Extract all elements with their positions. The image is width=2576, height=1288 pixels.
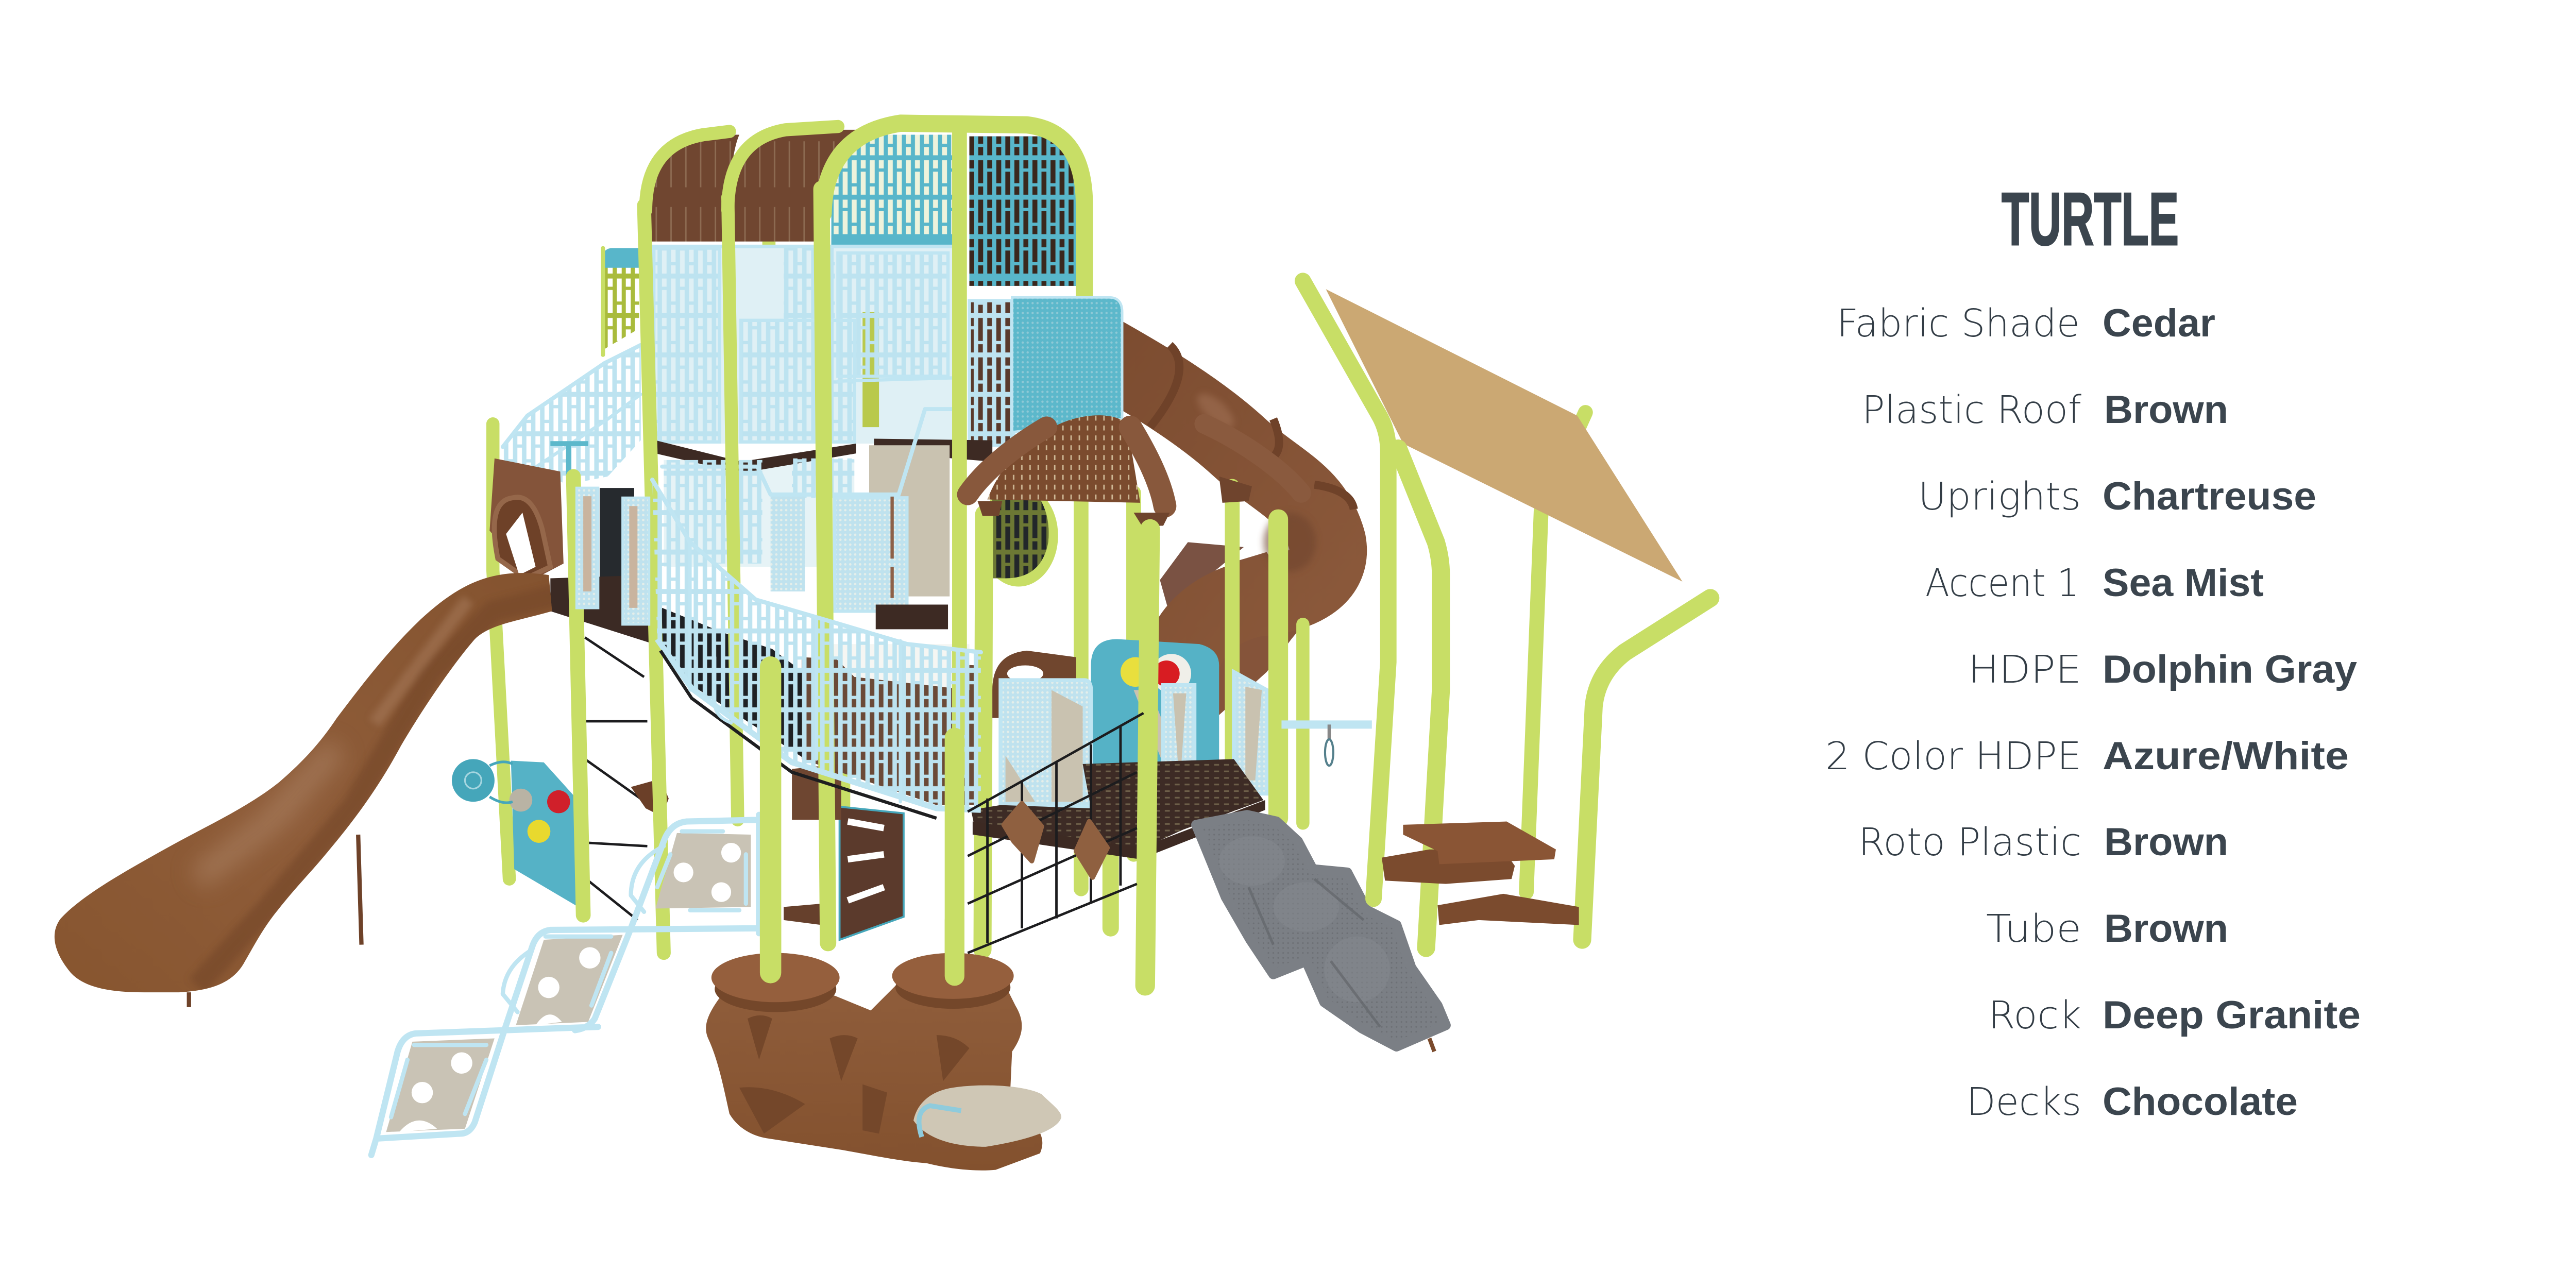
music panel with knobs bbox=[452, 759, 579, 907]
slide hood bbox=[489, 459, 564, 580]
slide supports bbox=[189, 835, 362, 1007]
panel: small mist gates bbox=[577, 488, 649, 624]
playground illustration bbox=[55, 123, 1710, 1171]
panel: azure roof panels bbox=[832, 134, 1084, 286]
rope net bbox=[968, 713, 1144, 953]
shade structure bbox=[1303, 281, 1710, 948]
tube slide bbox=[1097, 345, 1354, 718]
row: 2 color hdpe: Azure/White bbox=[2103, 734, 2349, 778]
row: roto plastic: Brown bbox=[2104, 820, 2228, 864]
row: rock bbox=[1988, 993, 2361, 1038]
small play roof bbox=[968, 415, 1301, 526]
row: decks: Decks bbox=[1967, 1080, 2081, 1124]
upper deck bbox=[655, 438, 992, 473]
rear shade post bbox=[1527, 412, 1585, 892]
row: 2 color hdpe: 2 Color HDPE bbox=[1825, 734, 2081, 778]
row: hdpe: Dolphin Gray bbox=[2103, 648, 2357, 691]
dark interior backdrop bbox=[550, 488, 977, 805]
panel: perforated play panels bbox=[992, 639, 1267, 811]
stepping pods bbox=[1382, 822, 1579, 925]
panel: brown plastic roof bbox=[651, 130, 862, 242]
hanging swing bar bbox=[1281, 724, 1372, 766]
row: rock: Rock bbox=[1988, 993, 2081, 1038]
straight slide bbox=[55, 573, 558, 1007]
posts under small roof bbox=[1145, 519, 1278, 986]
spiral ramp railing upper bbox=[503, 345, 641, 485]
row: hdpe bbox=[1968, 648, 2357, 692]
row: accent 1: Accent 1 bbox=[1925, 561, 2079, 605]
back posts bbox=[493, 240, 1303, 889]
row: tube bbox=[1986, 907, 2228, 951]
tower backdrop tint bbox=[654, 246, 956, 567]
row: fabric shade: Cedar bbox=[2103, 301, 2215, 345]
shade sail bbox=[1326, 289, 1683, 582]
row: decks bbox=[1967, 1080, 2298, 1124]
big spiral ramp railing bbox=[652, 480, 981, 818]
arches bbox=[646, 123, 1084, 312]
row: plastic roof: Brown bbox=[2104, 388, 2228, 432]
ladder panel bbox=[784, 764, 904, 940]
panel: upper level railings bbox=[649, 245, 1014, 445]
shade posts bbox=[1303, 281, 1388, 899]
row: fabric shade bbox=[1837, 301, 2215, 346]
row: decks: Chocolate bbox=[2103, 1080, 2298, 1124]
row: 2 color hdpe bbox=[1825, 734, 2349, 778]
row: uprights: Uprights bbox=[1918, 474, 2081, 519]
panel: lower level interior bbox=[662, 409, 953, 629]
row: tube: Tube bbox=[1986, 907, 2081, 951]
front posts bbox=[771, 667, 955, 976]
row: roto plastic bbox=[1858, 820, 2228, 865]
hex climber bbox=[371, 815, 759, 1155]
title: TURTLE bbox=[2002, 177, 2179, 261]
panel: colour specification bbox=[1825, 177, 2361, 1124]
row: plastic roof bbox=[1862, 388, 2228, 432]
back round panel bbox=[979, 485, 1058, 586]
row: uprights bbox=[1918, 474, 2316, 519]
row: roto plastic: Roto Plastic bbox=[1858, 820, 2081, 865]
row: accent 1: Sea Mist bbox=[2103, 561, 2264, 605]
post ends in rock bbox=[767, 920, 774, 973]
row: accent 1 bbox=[1925, 561, 2264, 605]
front tower posts bbox=[573, 131, 1111, 953]
row: tube: Brown bbox=[2104, 907, 2228, 951]
back olive panel bbox=[603, 248, 767, 355]
azure curved panel bbox=[1012, 297, 1122, 432]
left rope net bbox=[585, 637, 669, 920]
row: rock: Deep Granite bbox=[2103, 993, 2361, 1037]
rock climber bbox=[1196, 815, 1446, 1052]
climbing holds bbox=[1004, 803, 1042, 861]
row: uprights: Chartreuse bbox=[2103, 474, 2316, 518]
rock base bbox=[706, 920, 1042, 1171]
small deck bbox=[971, 759, 1265, 859]
tan disc bbox=[913, 1086, 1061, 1147]
row: hdpe: HDPE bbox=[1968, 648, 2081, 692]
row: fabric shade: Fabric Shade bbox=[1837, 301, 2080, 346]
row: plastic roof: Plastic Roof bbox=[1862, 388, 2081, 432]
